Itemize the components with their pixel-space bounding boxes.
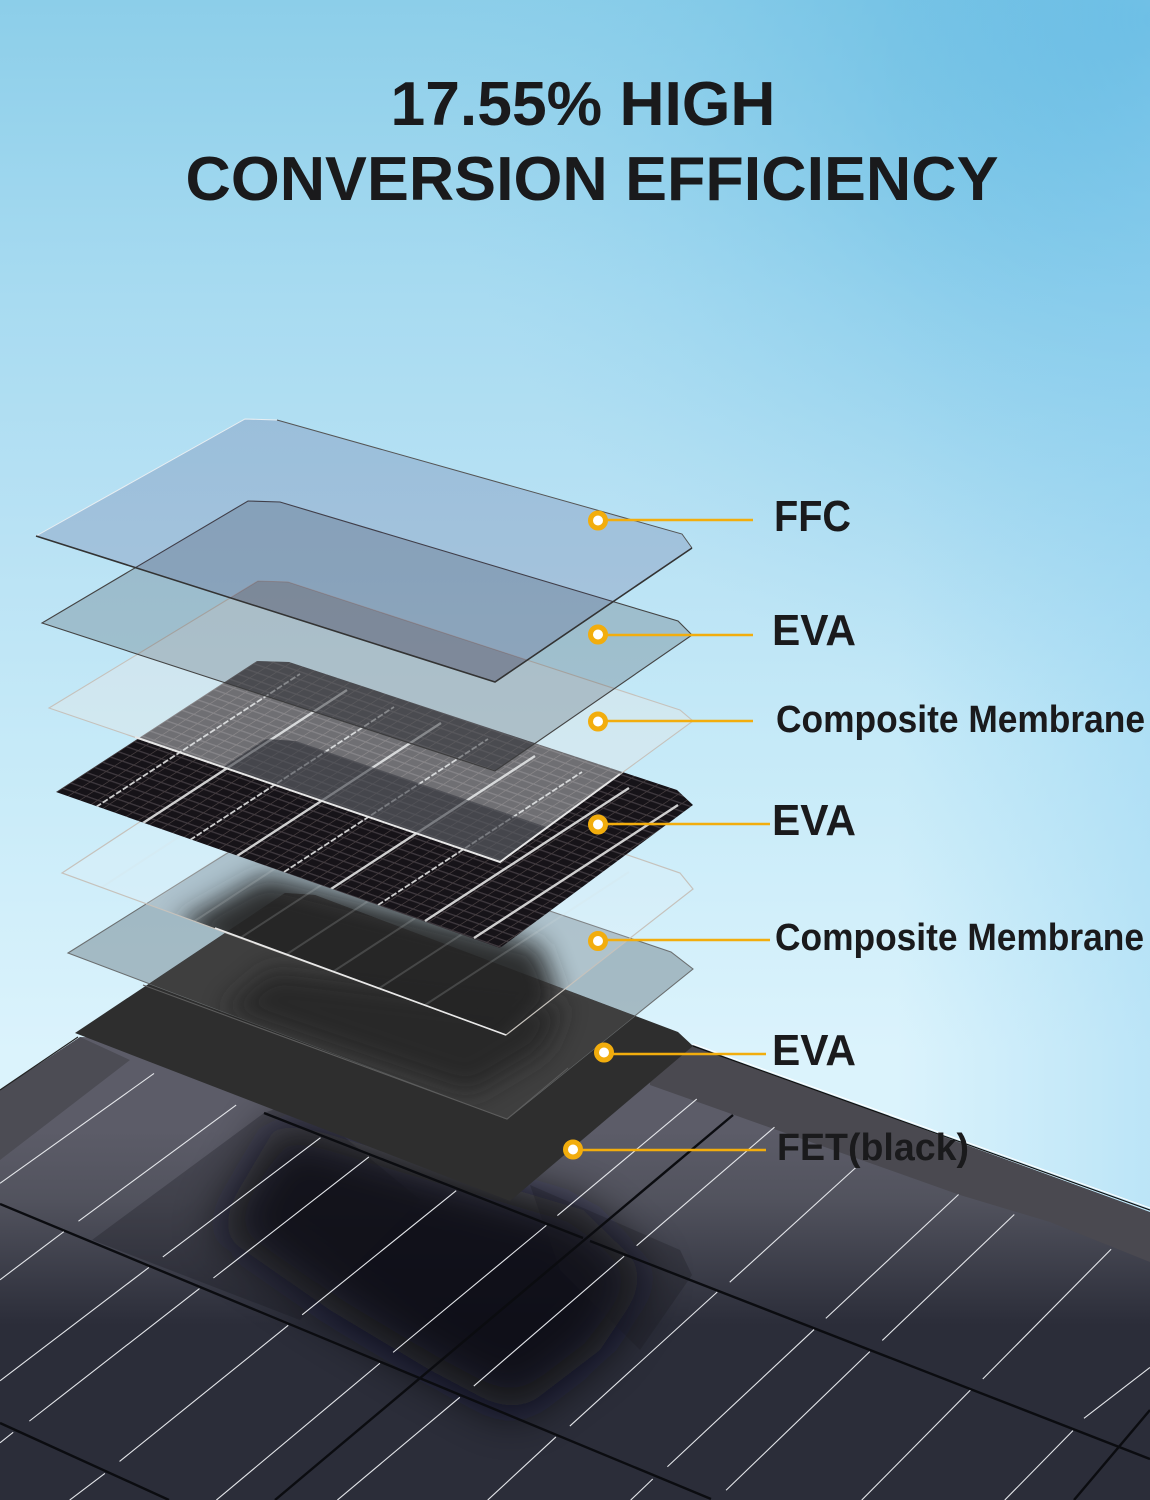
title: CONVERSION EFFICIENCY (186, 145, 999, 214)
callout: FET(black): FET(black) (777, 1127, 969, 1169)
callout: EVA: EVA (772, 606, 856, 655)
title: 17.55% HIGH (390, 70, 776, 139)
solar panel base (0, 1030, 1150, 1500)
layer: EVA lower (68, 825, 693, 1119)
callout: FFC (590, 492, 851, 541)
callout: EVA (590, 606, 856, 655)
layer: composite membrane lower (60, 822, 694, 1036)
callout: EVA: EVA (772, 1026, 856, 1075)
callout: EVA (596, 1026, 856, 1075)
layer: EVA upper (40, 500, 692, 772)
callout: EVA: EVA (772, 796, 856, 845)
callout: Composite Membrane (590, 917, 1144, 959)
layer: composite membrane upper (48, 580, 692, 864)
layer: FET black (75, 893, 693, 1201)
callout: Composite Membrane (590, 699, 1145, 741)
layer: solar cells (56, 661, 693, 948)
callout: FET(black) (566, 1127, 969, 1169)
layer: FFC (36, 418, 692, 683)
callout: EVA (590, 796, 856, 845)
callout: FFC: FFC (774, 492, 851, 541)
title (186, 70, 999, 214)
panel top edge highlight (0, 1037, 1150, 1210)
